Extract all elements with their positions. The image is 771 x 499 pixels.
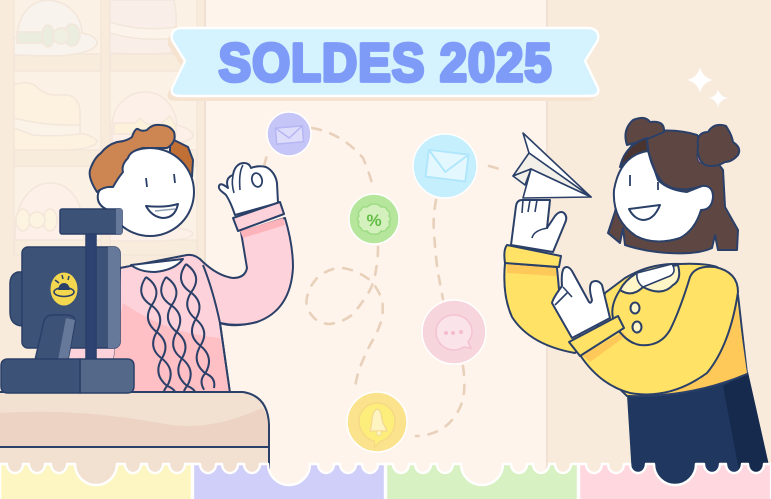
- raised hand: [511, 200, 566, 252]
- fringe: [647, 138, 702, 189]
- lower cuff: [569, 316, 624, 356]
- hat: behind head: [110, 228, 193, 241]
- display: [60, 209, 122, 234]
- left bun: [625, 118, 664, 145]
- dashed paths: [264, 128, 501, 436]
- counter: [0, 392, 269, 492]
- collar: [620, 265, 679, 293]
- hand: [219, 163, 278, 215]
- lower hand: [552, 267, 610, 338]
- hair back: [608, 131, 738, 253]
- right bun: [698, 125, 739, 166]
- hat: yellow bow: [15, 183, 84, 240]
- back hair: [170, 138, 193, 177]
- hat: pink round: [112, 92, 193, 146]
- sparkles: [687, 67, 728, 108]
- neck collar: [131, 259, 183, 272]
- icon: purple envelope: [267, 112, 311, 156]
- cash register: [1, 209, 134, 393]
- base: [80, 359, 134, 393]
- raised cuff: [504, 245, 561, 267]
- icon: blue envelope: [413, 134, 477, 198]
- hat: pink crown: [110, 0, 188, 54]
- hat shelf: [14, 0, 197, 255]
- cable braids: [139, 276, 178, 403]
- sweater: [70, 345, 115, 361]
- center panel: [205, 0, 547, 498]
- icon: green percent badge: [349, 194, 399, 244]
- face: [614, 151, 713, 242]
- paper plane: [513, 133, 591, 198]
- title banner: [168, 28, 598, 101]
- scalloped awning: [0, 464, 771, 499]
- character: shopkeeper: [70, 125, 293, 403]
- hat: cream: [14, 83, 97, 150]
- buttons: [630, 302, 640, 314]
- head: [106, 148, 194, 236]
- icon: pink chat bubble: [422, 300, 486, 364]
- bun ribbon: [697, 149, 705, 163]
- eyes: [630, 175, 658, 190]
- pole: [86, 234, 96, 360]
- logo: [50, 272, 78, 306]
- stand: [35, 315, 75, 360]
- icon: green percent badge: %: [366, 211, 382, 230]
- mouth: [146, 204, 178, 218]
- cuff: [233, 202, 284, 231]
- torso: [590, 264, 747, 396]
- icon: yellow bell: [347, 392, 407, 452]
- raised sleeve: [504, 263, 585, 353]
- character: customer: [504, 118, 771, 492]
- dark inner hair: [620, 138, 648, 167]
- hat: green ribbon: [14, 0, 97, 56]
- front sleeve: [580, 267, 738, 394]
- eyes: [146, 174, 175, 187]
- mouth: [629, 205, 660, 220]
- front hair: [90, 125, 175, 192]
- skirt: [627, 372, 771, 492]
- title: SOLDES 2025: [218, 32, 552, 93]
- yoke line: [612, 290, 633, 343]
